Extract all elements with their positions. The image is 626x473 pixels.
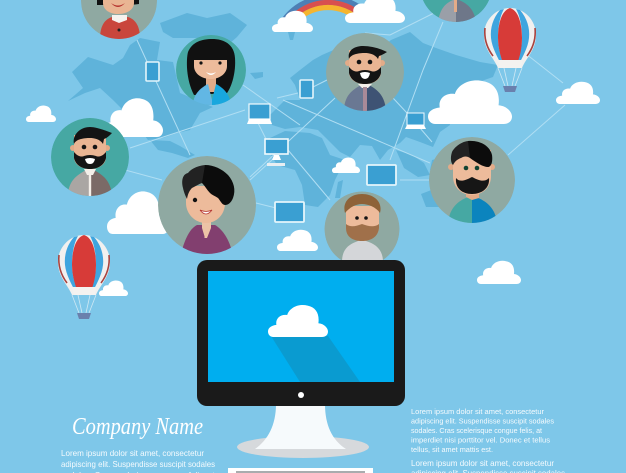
person: man top right — [420, 0, 492, 22]
monitor stand — [255, 404, 346, 449]
rainbow — [282, 0, 359, 18]
map: Africa — [268, 131, 345, 207]
keyboard — [228, 468, 373, 473]
icon: laptop left — [247, 104, 272, 124]
person: man with brown hair — [324, 192, 400, 266]
map: North America — [68, 38, 213, 140]
text block: right — [411, 407, 554, 454]
map: Madagascar — [335, 180, 343, 198]
monitor stand base — [237, 436, 369, 458]
map: Southeast Asia islands — [396, 150, 440, 177]
person: woman top left — [81, 0, 157, 39]
icon: laptop right — [405, 113, 426, 129]
map: Greenland — [160, 13, 247, 50]
map: islet under cloud — [288, 32, 295, 40]
text block: left: adipiscing elit. Suspendisse suscipit sodales — [61, 459, 215, 469]
map: Eurasia — [270, 32, 498, 160]
text block: right second paragraph: Lorem ipsum dolor sit amet, consectetur — [411, 458, 554, 468]
power button — [298, 392, 304, 398]
clouds — [26, 0, 600, 296]
text block: right second paragraph — [411, 458, 565, 473]
person: bearded man left — [51, 118, 129, 196]
icon: tablet centre — [300, 80, 313, 98]
heading: company name: Company Name — [72, 414, 203, 440]
cloud shadow — [271, 336, 360, 382]
monitor frame — [197, 260, 405, 406]
text block: right: tellus, sit amet mattis est. — [411, 445, 493, 454]
person: woman with long black hair — [176, 35, 246, 105]
icon: tablet landscape right — [367, 165, 396, 185]
map: Iceland — [250, 72, 263, 79]
computer monitor — [197, 260, 405, 458]
world map — [68, 13, 498, 207]
text block: right: adipiscing elit. Suspendisse suscipit sodales — [411, 416, 554, 426]
icon: tablet left — [146, 62, 159, 81]
connection lines — [125, 10, 565, 208]
icon: desktop computer — [265, 139, 288, 166]
text block: right: imperdiet nisi porttitor vel. Donec et tellus — [411, 436, 550, 444]
hot air balloon top right — [484, 8, 536, 92]
screen cloud — [268, 305, 328, 337]
text block: left — [61, 448, 216, 473]
text block: left: Lorem ipsum dolor sit amet, consectetur — [61, 448, 204, 458]
text block: right: Lorem ipsum dolor sit amet, consectetur — [411, 407, 544, 416]
map: Australia — [421, 189, 443, 207]
person: man with moustache — [429, 137, 515, 224]
text block: right: sodales. Cras scelerisque congue felis, at — [411, 426, 543, 435]
hot air balloon bottom left — [58, 235, 110, 319]
person: woman with short hair — [158, 156, 256, 262]
monitor screen — [208, 271, 394, 382]
person: bearded man top centre — [326, 33, 404, 111]
icon: tablet landscape left — [275, 202, 304, 222]
map: Central America — [150, 140, 195, 158]
devices — [146, 62, 426, 222]
